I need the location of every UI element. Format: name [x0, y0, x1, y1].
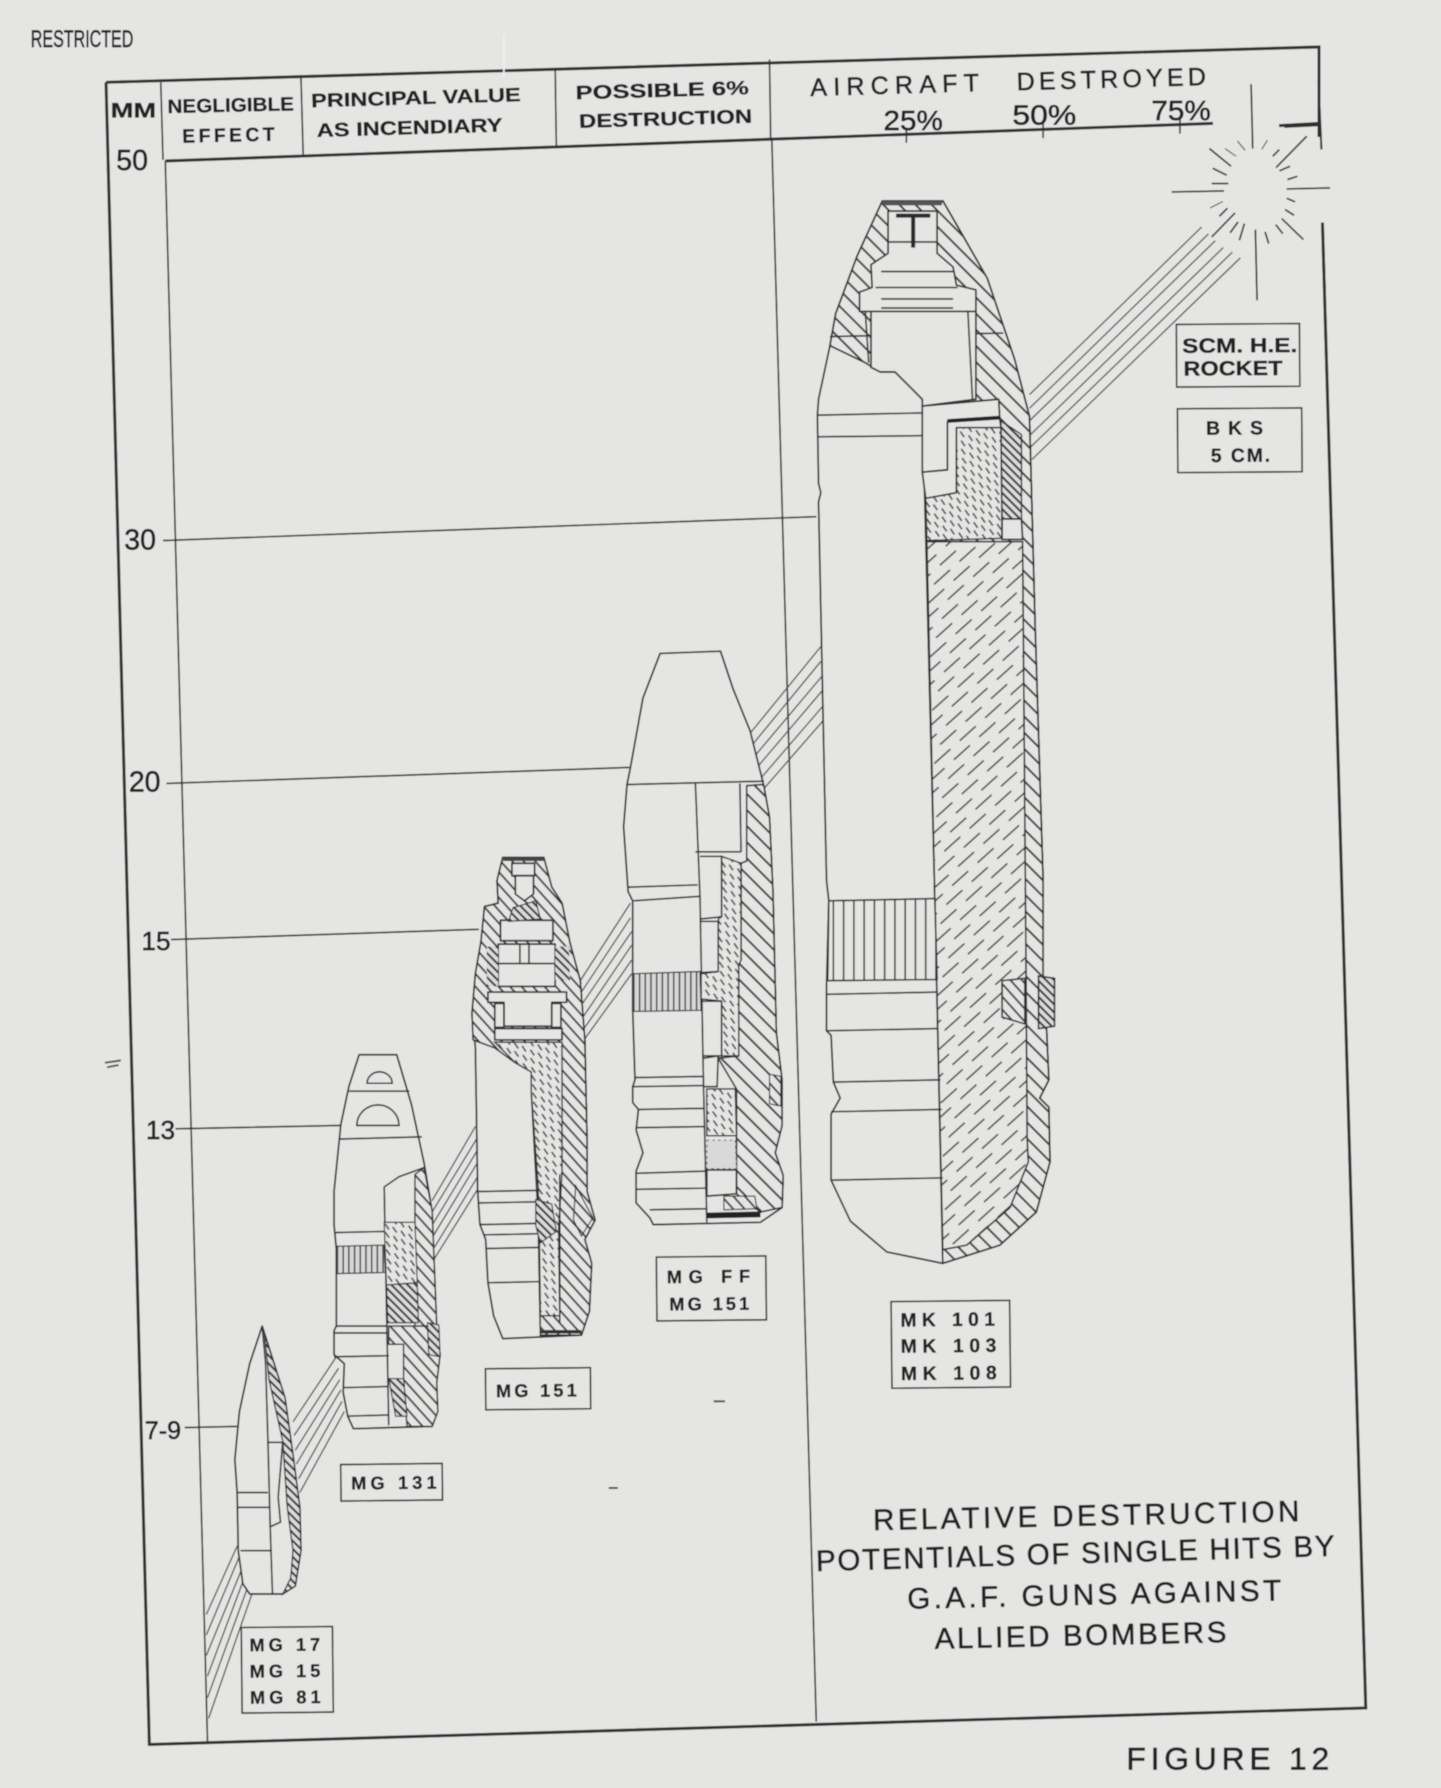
label: MK 101 MK 103 MK 108: MK 101 — [900, 1309, 995, 1332]
MK fuse T piece — [896, 216, 930, 248]
header: aircraft destroyed scale: DESTROYED — [1016, 63, 1206, 96]
calibre axis labels and leader lines: 7-9 — [145, 1417, 181, 1445]
chart title — [815, 1495, 1335, 1656]
chart title: POTENTIALS OF SINGLE HITS BY — [815, 1530, 1335, 1578]
MG 17 jacket hatching — [264, 1334, 301, 1594]
label: MG 17 MG 15 MG 81: MG 15 — [250, 1660, 320, 1682]
header: column labels: AS INCENDIARY — [316, 115, 503, 142]
MG 131 broken edge — [384, 1168, 424, 1425]
label: MG 17 MG 15 MG 81: MG 17 — [249, 1634, 320, 1655]
MK band — [817, 413, 922, 437]
header: column labels: EFFECT — [182, 124, 275, 148]
burst of rocket hit — [1172, 80, 1330, 300]
shell: MK 101 / 103 / 108 — [817, 201, 1055, 1263]
header: aircraft destroyed scale: 50% — [1012, 99, 1076, 130]
label: MG 17 MG 15 MG 81 — [241, 1627, 333, 1713]
MG 131 wall hatching — [415, 1168, 437, 1326]
MG 131 nose cut-outs — [367, 1072, 392, 1083]
label: MK 101 MK 103 MK 108 — [891, 1300, 1011, 1388]
MG FF filler — [701, 856, 741, 1056]
MG 151 base bands — [478, 1174, 560, 1323]
label: MG FF MG 151 — [656, 1256, 766, 1321]
label: 5 cm HE rocket: ROCKET — [1183, 357, 1283, 381]
label: MG 17 MG 15 MG 81: MG 81 — [250, 1686, 321, 1708]
label: MG FF MG 151: MG FF — [667, 1265, 750, 1287]
calibre axis labels and leader lines: 50 — [116, 145, 148, 177]
stray scan specks — [105, 1060, 725, 1488]
label: BKS 5 cm — [1177, 408, 1302, 473]
shell: MG 131 — [334, 1055, 440, 1429]
label: MK 101 MK 103 MK 108: MK 103 — [901, 1335, 997, 1358]
MK dark wall — [1001, 421, 1021, 519]
label: BKS 5 cm: BKS — [1206, 417, 1263, 440]
shell: MG FF / MG 151 — [624, 651, 783, 1225]
header: column labels: MM — [111, 98, 156, 123]
MK main filler — [927, 542, 1028, 1250]
MG FF inner blocks — [700, 856, 722, 1087]
label: MG 151: MG 151 — [496, 1379, 577, 1401]
header: aircraft destroyed scale — [810, 63, 1211, 136]
MK filler charge upper — [926, 428, 1002, 541]
calibre axis labels and leader lines: 20 — [129, 766, 161, 798]
label: MK 101 MK 103 MK 108: MK 108 — [901, 1362, 997, 1385]
MK lug — [1002, 978, 1025, 1024]
chart title: ALLIED BOMBERS — [934, 1616, 1227, 1656]
label: 5 cm HE rocket: SCM. H.E. — [1182, 334, 1297, 358]
header: column labels: PRINCIPAL VALUE — [311, 84, 521, 112]
MK driving band knurl — [828, 899, 937, 981]
header: aircraft destroyed scale: 75% — [1151, 95, 1211, 126]
restricted stamp: RESTRICTED — [31, 26, 133, 53]
label: MG FF MG 151: MG 151 — [669, 1293, 749, 1315]
header: aircraft destroyed scale: 25% — [884, 105, 943, 136]
MG FF knurl — [633, 972, 701, 1011]
header: column labels — [111, 77, 752, 148]
MG 151 filler — [495, 1042, 562, 1316]
header: column labels: DESTRUCTION — [579, 106, 752, 133]
figure number: FIGURE 12 — [1126, 1741, 1329, 1777]
label: BKS 5 cm: 5 CM. — [1211, 445, 1270, 467]
MG 131 knurl — [336, 1245, 385, 1274]
MG 131 filler — [384, 1222, 417, 1285]
header: column labels: NEGLIGIBLE — [167, 93, 294, 118]
MK fuse chamber — [860, 211, 976, 311]
chart title: G.A.F. GUNS AGAINST — [907, 1574, 1281, 1616]
MG 151 flange and chamber — [488, 992, 567, 1026]
MG FF wall hatching — [718, 785, 783, 1212]
shell: MG 151 — [472, 858, 595, 1339]
MG 151 cut-away wall hatching — [472, 858, 595, 1335]
calibre axis labels and leader lines: 13 — [146, 1115, 175, 1145]
MK flange and stem — [922, 399, 1000, 472]
MK cut-away wall hatching — [830, 201, 1050, 1263]
calibre axis labels and leader lines: 15 — [141, 926, 171, 956]
calibre axis labels and leader lines — [116, 145, 816, 1445]
label: MG 151 — [485, 1368, 591, 1410]
label: MG 131 — [341, 1463, 443, 1501]
calibre axis labels and leader lines: 30 — [124, 525, 156, 557]
trajectory bands — [206, 227, 1240, 1718]
shell: MG 17 / 15 / 81 — [235, 1326, 301, 1594]
MK inner cavity — [871, 311, 976, 406]
header: aircraft destroyed scale: AIRCRAFT — [810, 69, 979, 102]
header: column labels: POSSIBLE 6% — [575, 77, 749, 104]
label: 5 cm HE rocket — [1176, 324, 1300, 387]
label: MG 131: MG 131 — [351, 1472, 437, 1494]
MG 151 fuse — [512, 863, 535, 876]
chart title: RELATIVE DESTRUCTION — [873, 1495, 1300, 1537]
